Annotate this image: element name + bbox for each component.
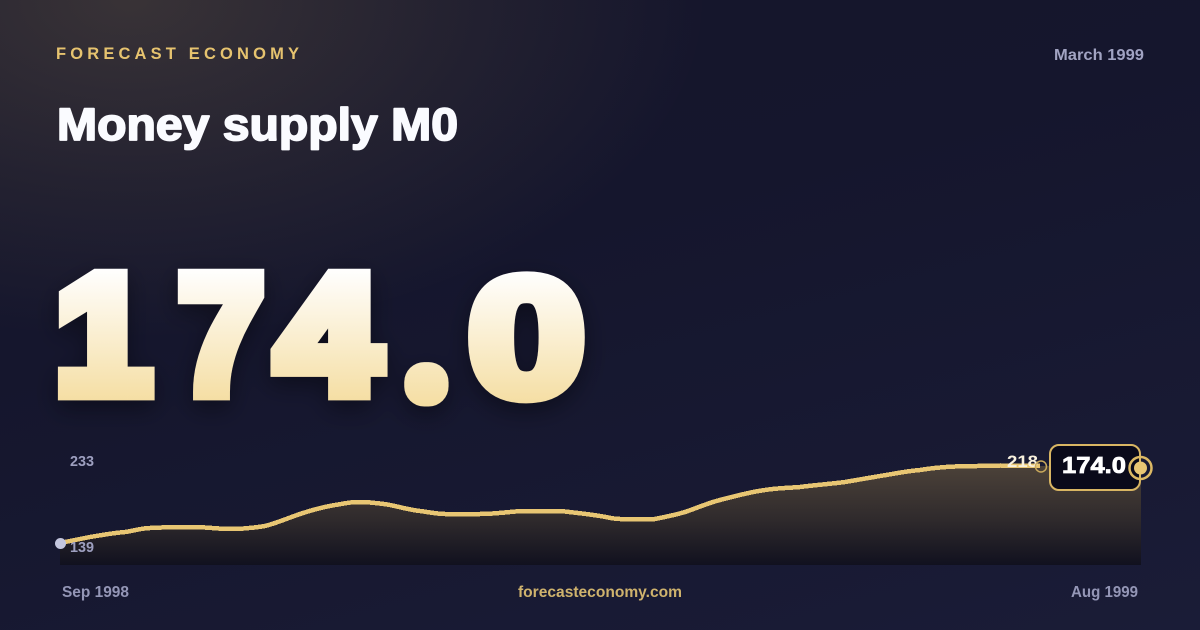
start date: Sep 1998 <box>62 584 129 601</box>
eyebrow: brand: FORECAST ECONOMY <box>56 45 299 63</box>
value callout <box>1050 445 1140 490</box>
axis max label: 233 <box>70 454 94 470</box>
title: Money supply M0 <box>57 99 458 150</box>
trend line <box>60 466 1040 543</box>
area fill <box>60 466 1141 565</box>
peak label: 218 <box>1007 452 1038 471</box>
big value: 4 <box>277 242 379 428</box>
big value: 7 <box>179 240 263 428</box>
axis min label: 139 <box>70 540 94 556</box>
big value: . <box>422 361 431 394</box>
end date: Aug 1999 <box>1071 584 1138 601</box>
start marker <box>55 538 66 549</box>
big value <box>56 240 585 431</box>
source url: forecasteconomy.com <box>518 584 682 601</box>
peak marker <box>1036 461 1046 472</box>
chart: area sparkline <box>55 445 1152 565</box>
end marker <box>1130 457 1152 479</box>
big value: 1 <box>56 241 151 428</box>
date label: March 1999 <box>1054 47 1144 64</box>
big value: 0 <box>468 245 585 431</box>
value callout: 174.0 <box>1062 452 1126 478</box>
